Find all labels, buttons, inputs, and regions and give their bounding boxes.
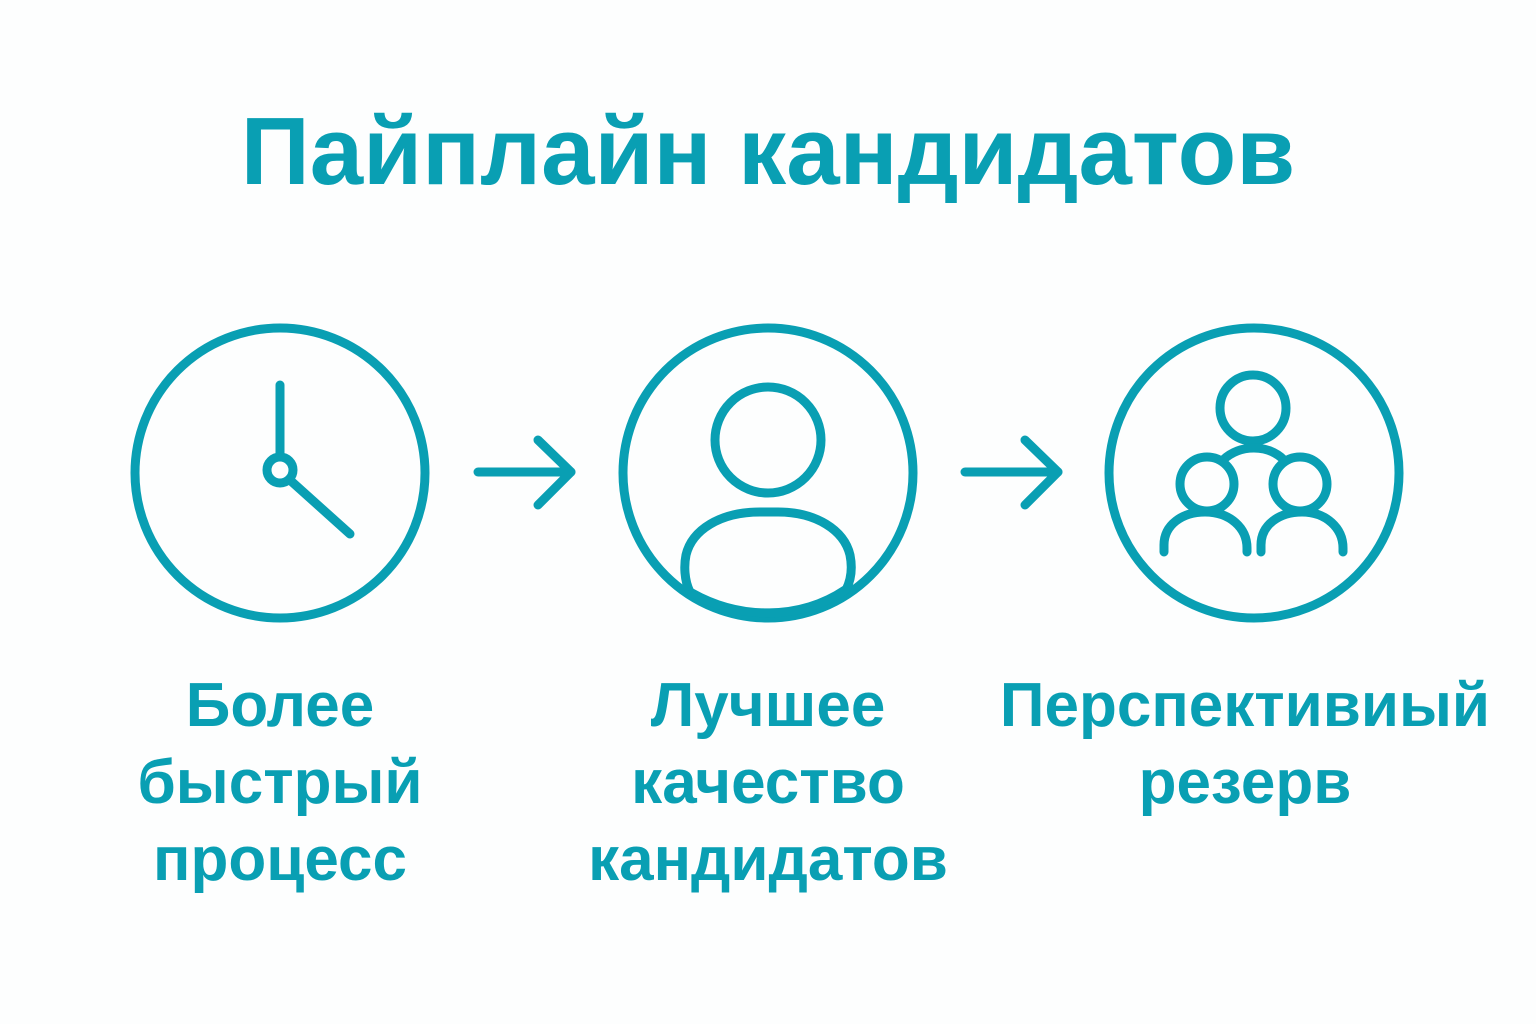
label: talent pool: Перспективиый: [1000, 671, 1490, 740]
label: faster process: Более: [186, 671, 374, 740]
label: better quality: кандидатов: [588, 825, 948, 894]
title: Пайплайн кандидатов: [241, 98, 1295, 205]
icon: clock: [135, 328, 425, 618]
label: talent pool: [1000, 671, 1490, 817]
icon: group: [1109, 328, 1399, 618]
label: faster process: быстрый: [137, 748, 423, 817]
label: better quality: качество: [631, 748, 905, 817]
arrow 2: [965, 440, 1058, 505]
label: better quality: Лучшее: [651, 671, 885, 740]
label: talent pool: резерв: [1139, 748, 1351, 817]
icon: person: [623, 328, 913, 618]
label: better quality: [588, 671, 948, 894]
label: faster process: процесс: [153, 825, 407, 894]
arrow 1: [478, 440, 571, 505]
label: faster process: [137, 671, 423, 894]
